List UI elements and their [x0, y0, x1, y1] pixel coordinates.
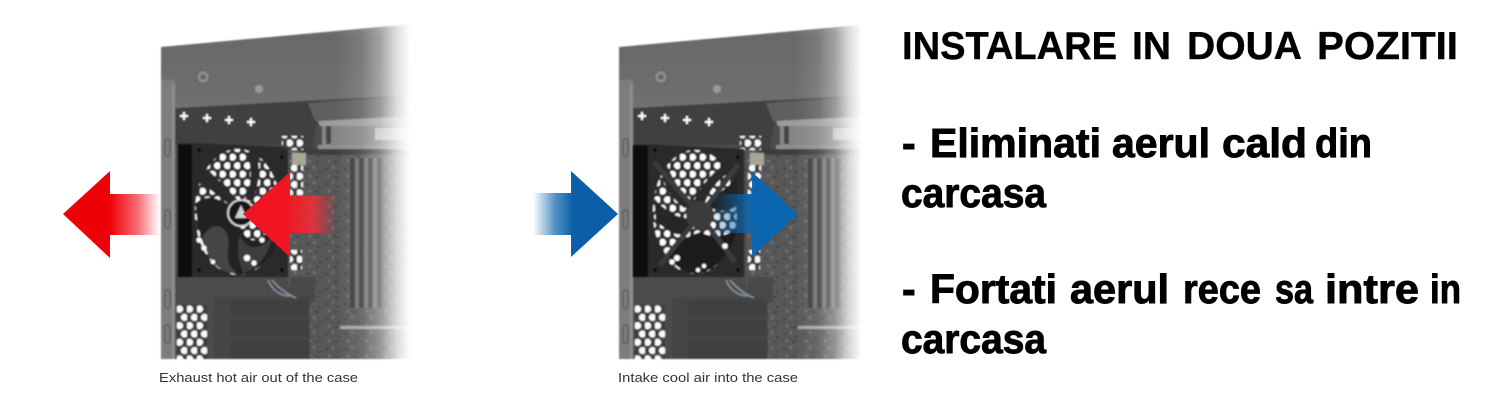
bullet: force cool air: Fortati: [930, 266, 1057, 312]
bullet: force cool air: sa: [1275, 266, 1314, 312]
bullet: remove hot air: aerul: [1112, 120, 1210, 166]
text block: installation positions: [901, 25, 1461, 362]
caption: intake: Intake cool air into the case: [618, 370, 798, 385]
panel: intake cool air illustration: [533, 15, 895, 385]
heading: IN: [1132, 25, 1171, 68]
right edge fade: [795, 15, 895, 365]
bullet continuation: force cool air: carcasa: [901, 316, 1047, 362]
case interior photo: intake: [619, 24, 870, 359]
bullet: force cool air: in: [1430, 266, 1461, 312]
arrow: intake incoming: [533, 171, 618, 257]
bullet: force cool air: rece: [1183, 266, 1261, 312]
bullet: force cool air: aerul: [1070, 266, 1169, 312]
bullet: remove hot air: Eliminati: [930, 120, 1101, 166]
bullet continuation: remove hot air: carcasa: [901, 170, 1047, 216]
right edge fade: [335, 15, 414, 365]
bullet: force cool air: -: [902, 266, 916, 312]
arrow: exhaust through fan: [243, 172, 335, 257]
bullet: remove hot air: din: [1315, 120, 1372, 166]
heading: INSTALARE: [902, 25, 1117, 68]
panel: exhaust hot air illustration: [63, 15, 414, 385]
bullet: force cool air: intre: [1325, 266, 1419, 312]
bullet: remove hot air: -: [902, 120, 916, 166]
icon: exhaust fan: [178, 143, 288, 277]
case interior photo: exhaust: [161, 24, 412, 359]
caption: exhaust: Exhaust hot air out of the case: [159, 370, 358, 385]
icon: intake fan: [633, 144, 744, 277]
arrow: intake through fan: [715, 172, 798, 257]
bullet: remove hot air: cald: [1222, 120, 1307, 166]
heading: POZITII: [1317, 25, 1458, 68]
heading: DOUA: [1187, 25, 1302, 68]
arrow: exhaust outgoing: [63, 171, 160, 258]
